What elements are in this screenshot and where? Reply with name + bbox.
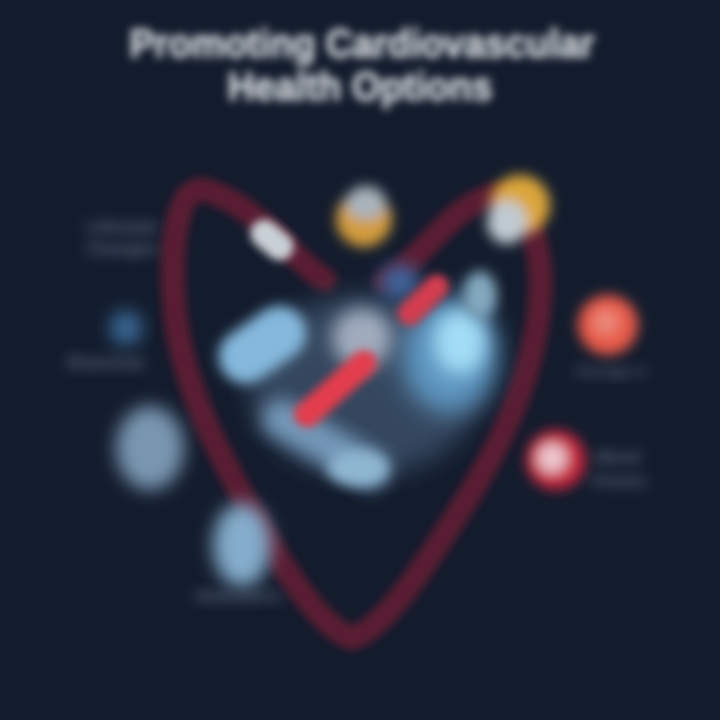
heart outline (173, 190, 541, 638)
label: right lower (592, 449, 646, 490)
label: right lower: Blood (596, 449, 640, 466)
label: left top (86, 219, 158, 258)
icon: yellow and white circle top (336, 186, 392, 247)
label: left top: Lifestyle (86, 219, 158, 236)
left pill (208, 295, 317, 394)
icon: white capsule top left (245, 214, 299, 266)
centre pale pill (332, 308, 392, 368)
title: Health Options (228, 65, 492, 109)
title (130, 22, 594, 109)
label: left middle: Exercise (68, 353, 144, 372)
top blue pill (380, 264, 420, 300)
label: right lower: Pressure (592, 473, 646, 490)
icon: red orange circle right (578, 295, 638, 355)
icon: small blue figure left (110, 311, 142, 345)
label: left top: Changes (86, 241, 158, 258)
label: right upper: Omega 3 (575, 363, 645, 379)
label: lower left: Medications (196, 588, 282, 605)
central illustration: pills and capsules (208, 264, 498, 496)
icon: pale blue capsule lower left (213, 503, 271, 587)
icon: pale blue circle left (116, 406, 184, 490)
lower capsule (255, 393, 396, 496)
dark backing (250, 295, 480, 475)
icon: red and white circle right (526, 430, 586, 490)
blue bubble right (402, 297, 498, 413)
red capsule upper (393, 270, 454, 330)
red capsule lower (289, 345, 382, 433)
top right pale capsule (463, 271, 497, 319)
icon: orange and blue circle top right (487, 175, 550, 244)
title: Promoting Cardiovascular (130, 22, 594, 66)
